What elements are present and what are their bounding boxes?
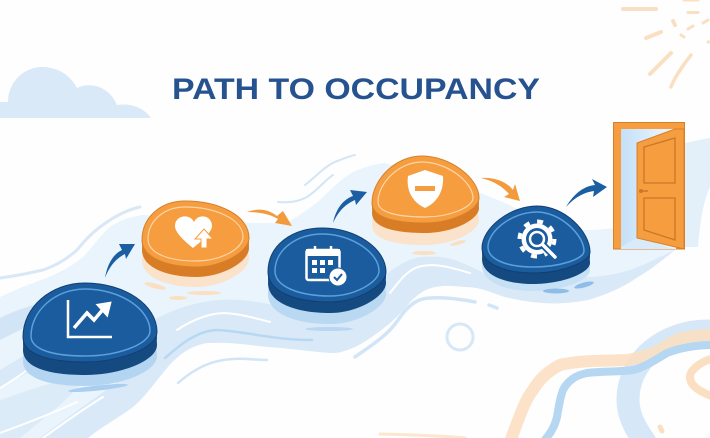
reflections <box>543 280 594 294</box>
icon: growth chart <box>68 300 112 337</box>
icon: heart with arrow <box>175 216 213 248</box>
arrow 5 <box>566 179 607 207</box>
icon: shield <box>408 170 443 208</box>
icon: gear with magnifier <box>520 222 555 257</box>
bubble ring <box>447 324 473 350</box>
arrow 2 <box>247 210 292 226</box>
step 5: gear stone <box>482 206 594 294</box>
water ripple lines <box>0 155 497 438</box>
arrow 4 <box>481 178 520 201</box>
door <box>614 122 684 249</box>
reflections <box>144 281 221 300</box>
step 4: shield stone <box>372 156 479 255</box>
arrow 3 <box>333 190 367 223</box>
step 1: market trend stone <box>23 283 157 394</box>
icon: calendar with check <box>306 246 347 286</box>
door leaf <box>637 129 684 249</box>
arrow 1 <box>105 244 135 278</box>
sunburst <box>623 0 710 87</box>
step 3: calendar stone <box>268 228 386 331</box>
river <box>0 138 710 438</box>
title: PATH TO OCCUPANCY <box>172 73 540 106</box>
reflections <box>412 239 466 255</box>
cloud <box>0 67 151 118</box>
step 2: wellness stone <box>142 201 249 300</box>
decorative streams bottom right <box>380 331 710 438</box>
